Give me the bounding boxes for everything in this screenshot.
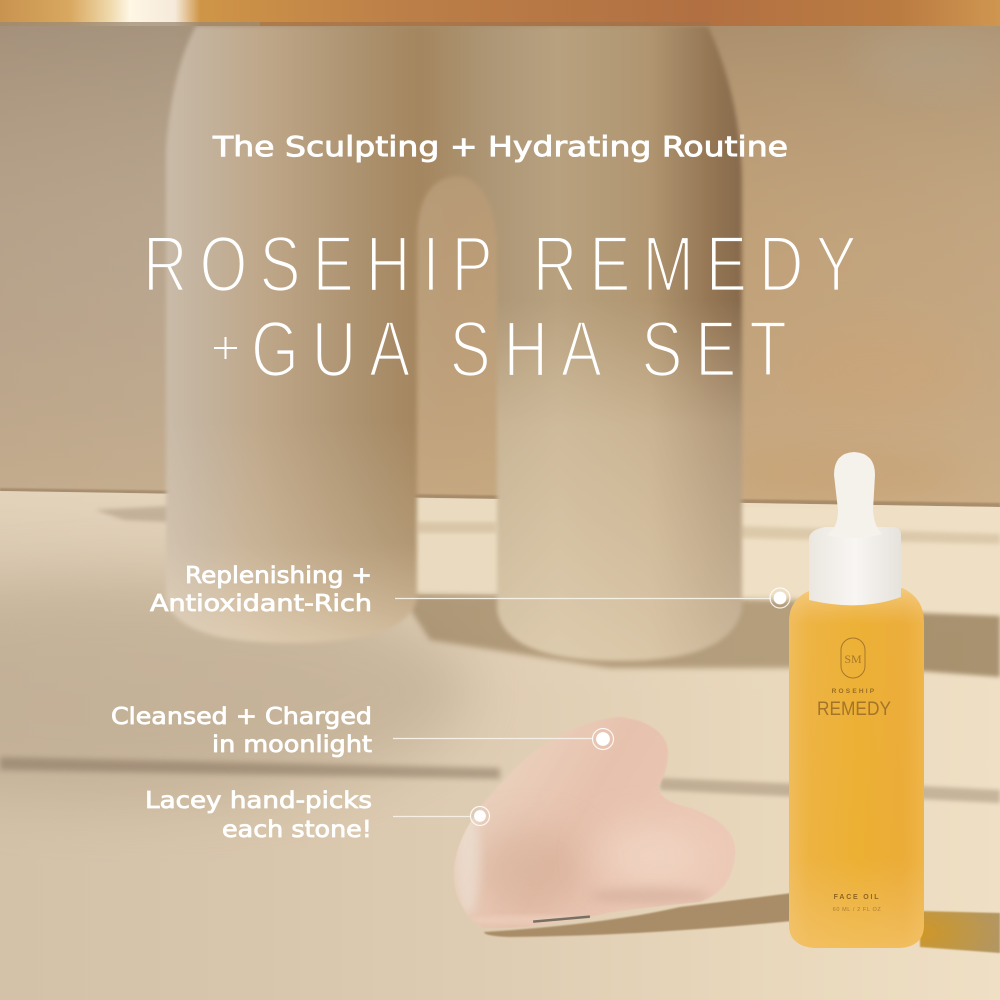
- callout: replenishing: [150, 563, 790, 617]
- dropper collar: [809, 527, 901, 605]
- top photo band: [0, 0, 1000, 26]
- logo badge: SM: [844, 652, 862, 666]
- bottle body: [789, 588, 924, 948]
- callout: lacey: [145, 788, 490, 843]
- callout: cleansed: Cleansed + Charged: [111, 704, 372, 730]
- callout: cleansed: in moonlight: [212, 732, 372, 758]
- title line 2: GUA SHA SET: [251, 306, 787, 394]
- callout: lacey: Lacey hand-picks: [145, 788, 372, 814]
- callout: lacey: each stone!: [222, 817, 372, 843]
- title line 2 plus: [214, 337, 237, 359]
- bottle label rosehip: ROSEHIP: [832, 688, 876, 695]
- bottle label volume: 60 ML / 2 FL OZ: [833, 907, 881, 913]
- callout: replenishing: Antioxidant-Rich: [150, 591, 372, 617]
- gua sha stone: [454, 717, 735, 928]
- title line 1: ROSEHIP REMEDY: [143, 221, 857, 309]
- subtitle: The Sculpting + Hydrating Routine: [212, 130, 788, 163]
- main title: [149, 237, 854, 376]
- callout: cleansed: [111, 704, 614, 758]
- logo badge: [841, 638, 865, 678]
- dropper bulb: [827, 452, 882, 538]
- cast shadows on floor: [0, 506, 1000, 803]
- gua sha stone shadow: [484, 893, 792, 937]
- callout: replenishing: Replenishing +: [185, 563, 372, 589]
- background wall: [0, 26, 1000, 508]
- blurred arch sculpture: [166, 26, 742, 661]
- floor: [0, 491, 1000, 1000]
- bottle label remedy: REMEDY: [817, 699, 891, 720]
- bottle shadow: [920, 911, 1000, 953]
- bottle label face oil: FACE OIL: [834, 894, 880, 901]
- serum bottle: [789, 452, 924, 948]
